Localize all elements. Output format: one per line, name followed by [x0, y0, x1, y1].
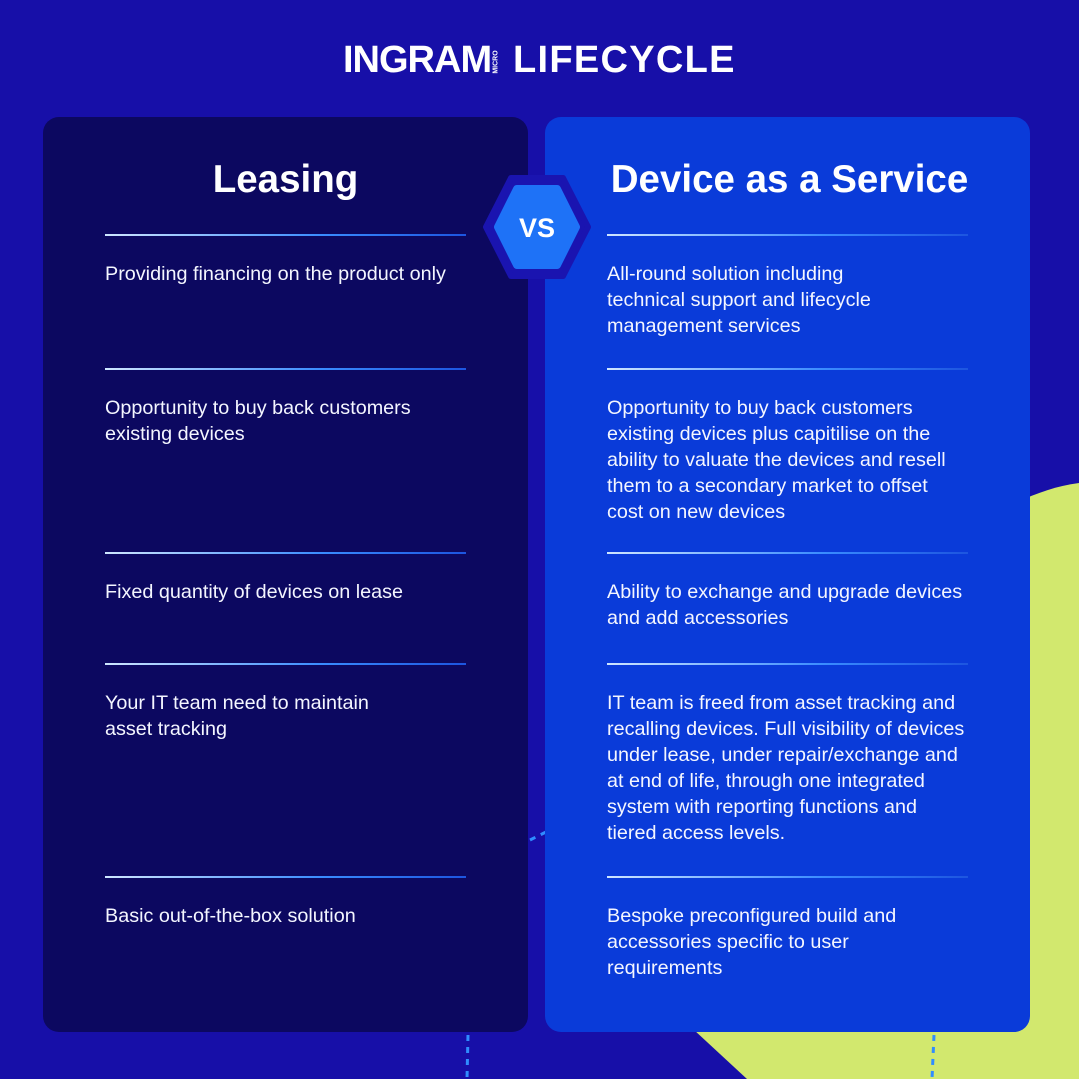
heading: device as a service: Device as a Service — [611, 158, 968, 201]
text: leasing 2 — [105, 397, 411, 445]
text: daas 4: system with reporting functions and — [607, 796, 917, 818]
logo: INGRAM LIFECYCLE — [343, 39, 736, 81]
text: daas 2: Opportunity to buy back customers — [607, 397, 913, 419]
text: leasing 2: Opportunity to buy back customers — [105, 397, 411, 419]
text: leasing 4: Your IT team need to maintain — [105, 692, 369, 714]
heading: leasing: Leasing — [213, 158, 358, 201]
text: daas 4: IT team is freed from asset tracking and — [607, 692, 955, 714]
text: daas 5 — [607, 905, 896, 979]
text: daas 4: tiered access levels. — [607, 822, 785, 844]
text: daas 2 — [607, 397, 946, 523]
text: leasing 4: asset tracking — [105, 718, 227, 740]
right dividers and text — [607, 234, 968, 979]
text: daas 3: Ability to exchange and upgrade devices — [607, 581, 962, 603]
text: leasing 3: Fixed quantity of devices on lease — [105, 581, 403, 603]
text: daas 4 — [607, 692, 964, 844]
text: daas 4: at end of life, through one integrated — [607, 770, 925, 792]
text: daas 2: cost on new devices — [607, 501, 785, 523]
panel: device as a service — [545, 117, 1030, 1032]
text: daas 5: requirements — [607, 957, 722, 979]
text: daas 1: All-round solution including — [607, 263, 843, 285]
text: daas 3 — [607, 581, 962, 629]
text: leasing 4 — [105, 692, 369, 740]
logo: MICRO — [493, 50, 500, 74]
text: daas 3: and add accessories — [607, 607, 788, 629]
text: daas 1: management services — [607, 315, 801, 337]
text: daas 2: ability to valuate the devices and resell — [607, 449, 946, 471]
text: daas 2: existing devices plus capitilise on the — [607, 423, 930, 445]
text: leasing 2: existing devices — [105, 423, 245, 445]
text: leasing 1: Providing financing on the product only — [105, 263, 446, 285]
text: daas 4: recalling devices. Full visibility of devices — [607, 718, 964, 740]
text: daas 5: Bespoke preconfigured build and — [607, 905, 896, 927]
text: daas 1 — [607, 263, 871, 337]
text: daas 1: technical support and lifecycle — [607, 289, 871, 311]
text: leasing 5: Basic out-of-the-box solution — [105, 905, 356, 927]
text: daas 2: them to a secondary market to offset — [607, 475, 928, 497]
icon: vs badge — [483, 175, 591, 279]
text: daas 4: under lease, under repair/exchange and — [607, 744, 958, 766]
text: daas 5: accessories specific to user — [607, 931, 849, 953]
left dividers and text — [105, 234, 466, 927]
icon: vs badge: VS — [519, 213, 555, 243]
panel: leasing — [43, 117, 528, 1032]
